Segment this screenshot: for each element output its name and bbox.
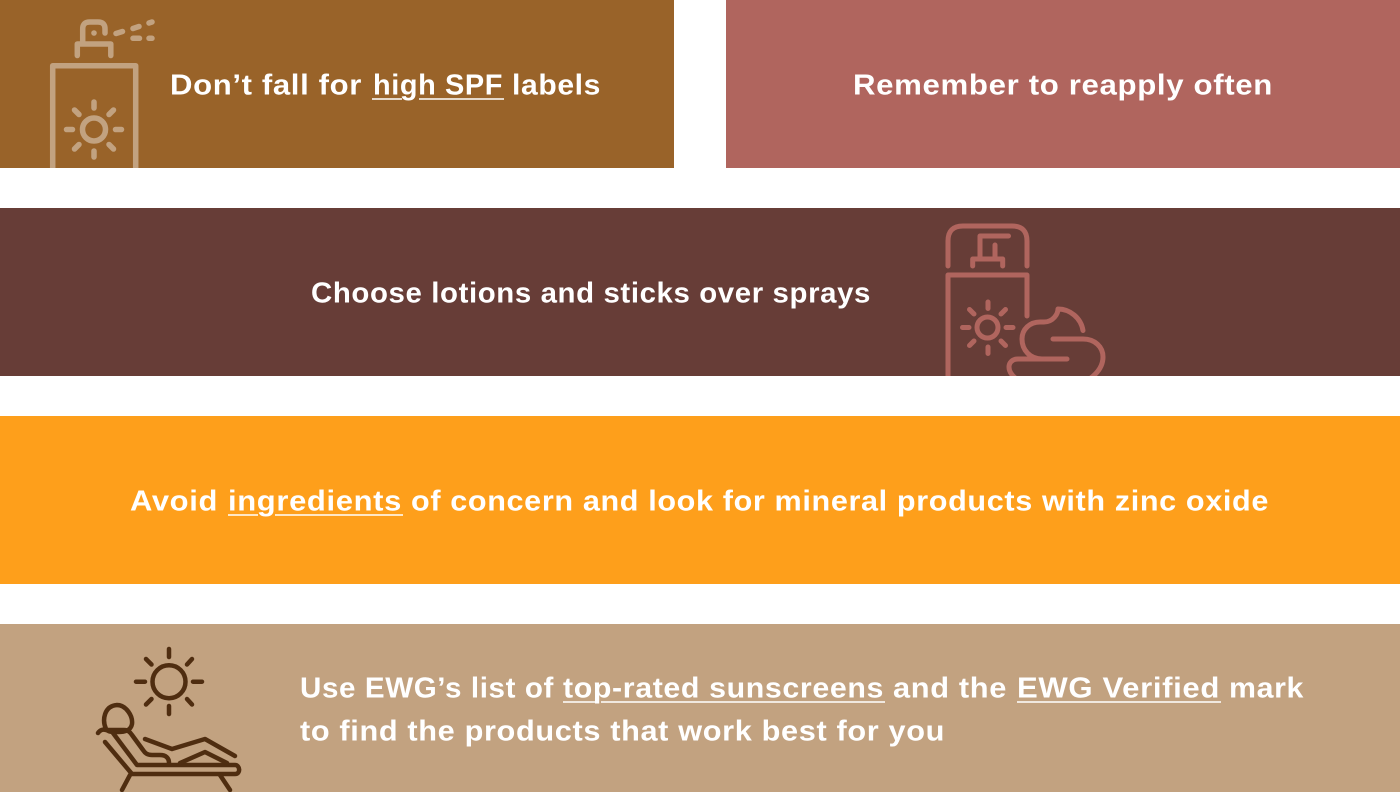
heading: high SPF	[170, 70, 601, 102]
heading: ingredients: of concern and look for mineral products with zinc oxide	[411, 486, 1269, 518]
heading: ingredients: Avoid	[130, 486, 218, 518]
heading: high SPF: high SPF	[373, 70, 503, 102]
text block: top-rated sunscreens: to find the products that work best for you	[300, 716, 945, 748]
panel: high SPF	[0, 0, 674, 175]
heading: high SPF: labels	[512, 70, 601, 102]
text block: top-rated sunscreens: and the	[893, 672, 1007, 704]
heading: reapply: Remember to reapply often	[853, 70, 1273, 102]
icon: person lounging under sun	[98, 649, 239, 790]
text block: top-rated sunscreens: mark	[1229, 672, 1304, 704]
panel: top-rated	[0, 624, 1400, 792]
heading: lotions: Choose lotions and sticks over sprays	[311, 278, 871, 310]
panel: lotions	[0, 208, 1400, 385]
heading: ingredients: ingredients	[228, 486, 402, 518]
text block: top-rated sunscreens: EWG Verified	[1017, 672, 1220, 704]
panel: ingredients	[0, 416, 1400, 584]
text block: top-rated sunscreens: top-rated sunscreens	[563, 672, 884, 704]
panel: reapply	[726, 0, 1400, 168]
heading: high SPF: Don’t fall for	[170, 70, 362, 102]
text block: top-rated sunscreens: Use EWG’s list of	[300, 672, 554, 704]
icon: spray bottle	[53, 22, 152, 175]
text block: top-rated sunscreens	[300, 672, 1304, 748]
icon: lotion bottle and cream	[948, 226, 1103, 385]
